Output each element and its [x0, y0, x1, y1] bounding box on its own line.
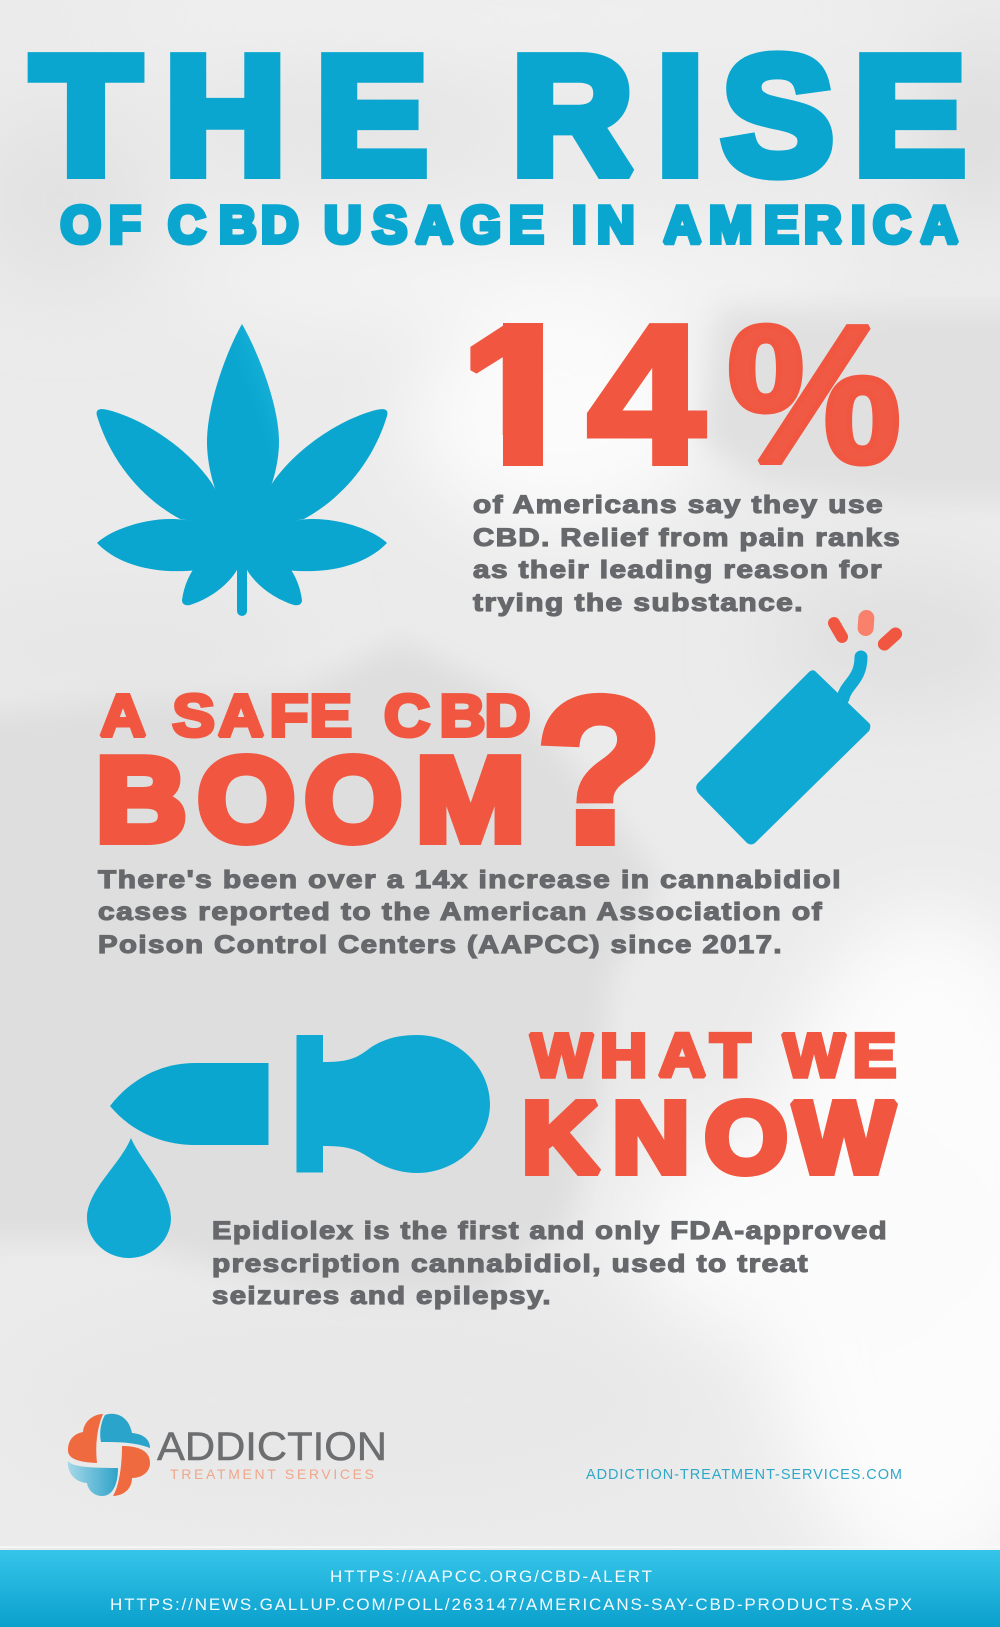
stat number: 4: [588, 285, 704, 504]
source link 1: HTTPS://AAPCC.ORG/CBD-ALERT: [330, 1567, 652, 1586]
heading: know: KNOW: [522, 1082, 895, 1193]
heading: what we: WHAT WE: [531, 1022, 896, 1090]
know description: seizures and epilepsy.: [212, 1282, 552, 1310]
stat description: trying the substance.: [473, 589, 804, 617]
panel: 14 percent stat: [96, 322, 900, 617]
stat number: %: [727, 285, 901, 504]
panel: what we know: [87, 1022, 896, 1310]
know description: Epidiolex is the first and only FDA-approved: [212, 1217, 888, 1245]
heading: boom: BOO: [96, 733, 402, 866]
stat description: [473, 491, 901, 617]
icon: dropper with drop: [87, 1035, 490, 1258]
question mark: ?: [537, 656, 662, 885]
boom description: [98, 866, 842, 959]
title: HE RISE: [165, 23, 965, 209]
stat description: CBD. Relief from pain ranks: [473, 524, 901, 552]
icon: firecracker: [696, 609, 905, 844]
title: T: [32, 23, 140, 209]
logo: addiction treatment services: [68, 1414, 387, 1496]
logo tagline: TREATMENT SERVICES: [170, 1466, 374, 1482]
stat number: [470, 322, 900, 466]
heading: boom: M: [416, 734, 525, 866]
footer band with sources: [0, 1546, 1000, 1627]
stat description: of Americans say they use: [473, 491, 884, 519]
icon: medical cross: [68, 1414, 150, 1496]
icon: cannabis leaf: [97, 324, 387, 616]
boom description: Poison Control Centers (AAPCC) since 2017.: [98, 931, 783, 959]
subtitle: OF CBD USAGE IN AMERICA: [60, 196, 958, 254]
boom description: There's been over a 14x increase in cannabidiol: [98, 866, 842, 894]
know description: prescription cannabidiol, used to treat: [212, 1250, 809, 1278]
know description: [212, 1217, 888, 1310]
website url: ADDICTION-TREATMENT-SERVICES.COM: [586, 1467, 902, 1483]
stat description: as their leading reason for: [473, 556, 883, 584]
heading: a safe CBD: A SAFE CBD: [100, 683, 531, 749]
panel: safe CBD boom: [96, 609, 905, 959]
logo wordmark: ADDICTION: [157, 1425, 387, 1469]
boom description: cases reported to the American Association of: [98, 898, 823, 926]
stat number: 1: [461, 285, 570, 504]
source link 2: HTTPS://NEWS.GALLUP.COM/POLL/263147/AMERICANS-SAY-CBD-PRODUCTS.ASPX: [110, 1595, 912, 1614]
